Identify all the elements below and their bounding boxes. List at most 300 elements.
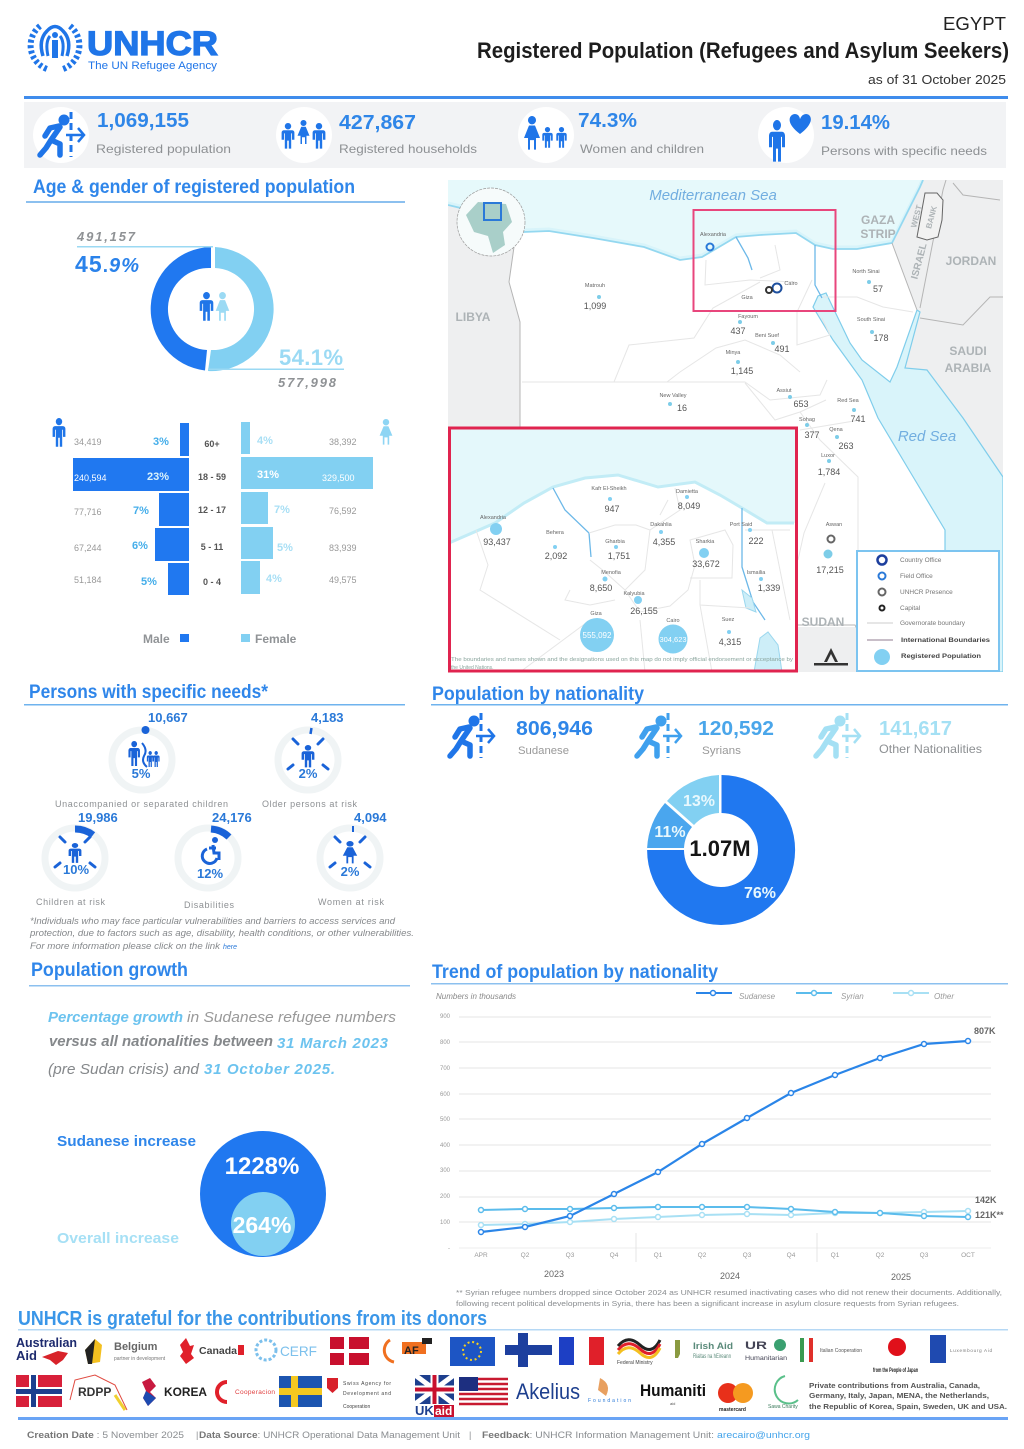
flag: Denmark xyxy=(330,1337,369,1365)
governorate labels: main map: 653 xyxy=(793,399,809,409)
gauge: older persons: 2% xyxy=(299,766,318,781)
donor: Ireland: Irish Aid xyxy=(693,1341,733,1351)
text block: growth description: 31 October 2025. xyxy=(204,1061,335,1078)
gauge: women at risk: 4,094 xyxy=(354,810,387,825)
female percentages: 7% xyxy=(274,504,290,516)
gauge: older persons: 4,183 xyxy=(311,710,344,725)
governorate labels: main map: 57 xyxy=(873,284,883,294)
donor: Spain: Cooperacion xyxy=(235,1389,275,1396)
inset labels: Damietta xyxy=(676,489,699,495)
year labels: 2023 xyxy=(544,1269,564,1279)
y axis labels: 900 xyxy=(440,1014,451,1020)
inset labels: Kalyubia xyxy=(623,591,645,597)
donor: Switzerland: Development and xyxy=(343,1391,391,1397)
governorate labels: main map: North Sinai xyxy=(852,269,880,275)
governorate labels: main map: South Sinai xyxy=(857,317,885,323)
governorate labels: main map: 491 xyxy=(774,344,790,354)
trend legend xyxy=(696,990,954,1001)
male values: 67,244 xyxy=(74,543,102,553)
donor: Ireland xyxy=(675,1340,733,1360)
y axis labels: - xyxy=(448,1246,450,1252)
female callout: 54.1% xyxy=(279,345,343,370)
figure: Sudanese xyxy=(450,713,593,758)
footnote: Syrian numbers xyxy=(456,1288,1002,1308)
panel: specific needs gauges xyxy=(29,710,414,952)
y axis labels: 600 xyxy=(440,1092,451,1098)
gauge: unaccompanied children: 5% xyxy=(132,766,151,781)
inset labels: Behera xyxy=(546,530,565,536)
footer: arecairo@unhcr.org xyxy=(717,1430,810,1440)
map legend: Country Office xyxy=(900,557,942,564)
governorate labels: main map: 1,145 xyxy=(731,366,753,376)
inset labels: Giza xyxy=(590,611,603,617)
gauge: children at risk: 10% xyxy=(63,862,89,877)
donor: UK aid: UK xyxy=(415,1403,434,1418)
inset labels: 555,092 xyxy=(583,631,612,640)
donor: Ireland: Rialtas na hEireann xyxy=(693,1354,731,1360)
footnote: Syrian numbers: following recent political developments in Syria, there has been a significant increase in asylum closure requests from Syrian refugees. xyxy=(456,1299,959,1308)
x axis labels: Q2 xyxy=(698,1252,707,1259)
female values: 38,392 xyxy=(329,437,357,447)
gauge: children at risk: Children at risk xyxy=(36,897,106,907)
donor: Mastercard xyxy=(718,1383,753,1413)
age labels: 5 - 11 xyxy=(201,542,223,552)
figure: Syrians: 120,592 xyxy=(698,718,774,740)
donor logos xyxy=(16,1333,1007,1418)
disclaimer xyxy=(451,657,793,669)
offices on main map xyxy=(706,244,834,542)
chart: nationality donut: 11% xyxy=(654,824,686,841)
icon: refugee crossing xyxy=(40,112,84,157)
inset labels: 1,751 xyxy=(608,551,630,561)
governorate labels: main map: 263 xyxy=(838,441,854,451)
chart: nationality donut: 1.07M xyxy=(689,836,751,861)
figure: Syrians: Syrians xyxy=(702,745,742,757)
text: private contributions: Private contributions from Australia, Canada, xyxy=(809,1381,980,1390)
female values: 49,575 xyxy=(329,575,357,585)
governorate labels: main map: Red Sea xyxy=(837,398,860,404)
year labels: 2024 xyxy=(720,1271,740,1281)
x axis labels: OCT xyxy=(961,1252,975,1259)
disclaimer: The boundaries and names shown and the designations used on this map do not imply official endorsement or acceptance by xyxy=(451,657,794,663)
text: private contributions: the Republic of Korea, Spain, Sweden, UK and USA. xyxy=(809,1402,1007,1411)
x axis labels xyxy=(474,1252,975,1259)
inset labels: Dakahlia xyxy=(650,522,673,528)
map legend: UNHCR Presence xyxy=(900,589,953,596)
chart: growth circles xyxy=(57,1131,326,1257)
location frame xyxy=(694,210,836,311)
governorate labels: main map: 178 xyxy=(873,333,889,343)
figure: registered population: 1,069,155 xyxy=(97,110,189,132)
gauge: disabilities: Disabilities xyxy=(184,900,234,910)
inset labels: 8,049 xyxy=(678,501,700,511)
flag: Sweden xyxy=(279,1376,322,1407)
icon: specific needs xyxy=(769,114,811,162)
chart: gender donut xyxy=(75,229,344,390)
male values xyxy=(74,437,107,585)
governorate labels: main map: Luxor xyxy=(821,453,835,459)
donor: Japan xyxy=(873,1338,918,1374)
x axis labels: Q1 xyxy=(654,1252,663,1259)
country labels: WEST xyxy=(909,204,924,229)
donor: foundation xyxy=(588,1378,631,1404)
male values: 34,419 xyxy=(74,437,102,447)
male values: 77,716 xyxy=(74,507,102,517)
logo wordmark: UNHCR xyxy=(87,25,218,63)
age labels xyxy=(198,439,226,587)
y axis labels: 500 xyxy=(440,1117,451,1123)
inset labels: Gharbia xyxy=(605,539,626,545)
chart: growth circles: Sudanese increase xyxy=(57,1133,196,1150)
governorate labels: main map: Fayoum xyxy=(738,314,758,320)
series: Syrian xyxy=(478,1204,970,1220)
footer: Creation Date : 5 November 2025 xyxy=(27,1430,184,1440)
inset labels xyxy=(480,486,780,647)
governorate labels: main map: Aswan xyxy=(826,522,842,528)
inset labels: Kafr El-Sheikh xyxy=(591,486,627,492)
governorate labels: main map: Sohag xyxy=(799,417,815,423)
icon: male xyxy=(53,418,65,447)
text block: growth description xyxy=(48,1009,397,1078)
map legend xyxy=(857,551,999,671)
donor: Korea xyxy=(142,1378,207,1406)
donor: Humaniti: Humaniti xyxy=(640,1381,706,1400)
country labels xyxy=(456,204,996,629)
donor: Spain xyxy=(217,1382,275,1402)
inset markers xyxy=(490,495,763,654)
donor: multi-partner fund xyxy=(745,1339,787,1362)
footnote: protection, due to factors such as age, disability, health conditions, or other vulnerabilities. xyxy=(29,928,414,939)
country labels: GAZA xyxy=(861,213,895,227)
inset labels: 93,437 xyxy=(483,537,511,547)
chart: nationality donut: 76% xyxy=(744,885,776,902)
figure: Sudanese: 806,946 xyxy=(516,718,593,740)
governorate labels: main map: Beni Suef xyxy=(755,333,779,339)
title block xyxy=(477,14,1009,87)
text: private contributions xyxy=(809,1381,1007,1411)
heading: donors: UNHCR is grateful for the contributions from its donors xyxy=(18,1308,487,1330)
gauge: women at risk xyxy=(318,810,387,907)
inset labels: Cairo xyxy=(666,618,680,624)
figure: Syrians xyxy=(637,713,774,758)
map legend: Field Office xyxy=(900,573,933,580)
logo: UNHCR xyxy=(31,25,218,72)
donor: UK aid xyxy=(415,1375,454,1418)
inset labels: 947 xyxy=(604,504,620,514)
male percentages xyxy=(132,436,169,588)
trend legend: Other xyxy=(934,992,954,1001)
chart: nationality donut: 13% xyxy=(683,793,715,810)
chart: age pyramid xyxy=(53,418,392,646)
donor: Switzerland: Swiss Agency for xyxy=(343,1381,391,1387)
icon: UNHCR wreath and hands xyxy=(31,26,79,69)
male percentages: 7% xyxy=(133,505,149,517)
heading: age and gender: Age & gender of registered population xyxy=(33,177,355,198)
governorate labels: main map: Alexandria xyxy=(700,232,727,238)
inset labels: Ismailia xyxy=(747,570,766,576)
female callout xyxy=(208,345,344,390)
governorate labels: main map xyxy=(584,232,889,575)
male values: 51,184 xyxy=(74,575,102,585)
end labels xyxy=(974,1026,1004,1220)
figure: women and children: 74.3% xyxy=(578,110,637,132)
footnote: here xyxy=(223,944,237,951)
label: Red Sea: Red Sea xyxy=(898,428,956,445)
panel: nationality figures xyxy=(450,713,982,758)
donor: Canada: Canada xyxy=(199,1346,237,1357)
logo tagline: The UN Refugee Agency xyxy=(88,60,218,72)
gauge: unaccompanied children xyxy=(55,710,228,809)
figure: households: Registered households xyxy=(339,142,477,156)
donor: DRL: AF xyxy=(404,1345,419,1357)
female percentages: 31% xyxy=(257,469,279,481)
footnote: For more information please click on the link xyxy=(30,941,221,952)
governorate labels: main map: Assiut xyxy=(777,388,792,394)
donor: Belgium: Belgium xyxy=(114,1341,158,1353)
flag: France xyxy=(559,1337,604,1365)
inset labels: 26,155 xyxy=(630,606,658,616)
figure: women and children: Women and children xyxy=(580,142,704,156)
y axis labels: 200 xyxy=(440,1194,451,1200)
governorate labels: main map: Matrouh xyxy=(585,283,605,289)
sea label: Mediterranean Sea xyxy=(649,187,777,204)
gauge: disabilities xyxy=(178,810,252,910)
figure: specific needs: 19.14% xyxy=(821,112,890,134)
male bars xyxy=(73,423,189,595)
y axis labels: 800 xyxy=(440,1040,451,1046)
governorate labels: main map: 437 xyxy=(730,326,746,336)
footer: Feedback : UNHCR Information Management Unit: xyxy=(482,1430,714,1440)
inset labels: 4,355 xyxy=(653,537,675,547)
y axis labels xyxy=(440,1014,451,1252)
text block: growth description: 31 March 2023 xyxy=(277,1035,389,1052)
donor: Mastercard: mastercard xyxy=(719,1407,746,1413)
gauge: disabilities: 24,176 xyxy=(212,810,252,825)
x axis labels: Q3 xyxy=(743,1252,752,1259)
pyramid legend: Male xyxy=(143,632,170,646)
inset labels: 304,623 xyxy=(659,635,687,644)
donor: Australian Aid: Aid xyxy=(16,1348,37,1363)
pyramid legend xyxy=(143,632,297,646)
globe locator xyxy=(457,188,525,256)
male values: 240,594 xyxy=(74,473,107,483)
series: Sudanese xyxy=(478,1038,970,1234)
y axis labels: 100 xyxy=(440,1220,451,1226)
male percentages: 23% xyxy=(147,471,169,483)
chart: nationality donut xyxy=(647,775,795,925)
footnote xyxy=(29,916,414,952)
figure: specific needs: Persons with specific needs xyxy=(821,144,987,158)
chart: growth circles: Overall increase xyxy=(57,1230,179,1247)
female percentages xyxy=(257,435,293,585)
panel: key figures xyxy=(24,102,1006,168)
country labels: SAUDI xyxy=(949,344,987,358)
donor: CERF xyxy=(256,1340,317,1360)
donor: RDPP xyxy=(70,1375,127,1410)
governorate labels: main map: 1,784 xyxy=(818,467,840,477)
figure: Sudanese: Sudanese xyxy=(518,745,569,757)
pyramid legend: Female xyxy=(255,632,297,646)
donor: crescent xyxy=(768,1376,798,1410)
flag: Finland xyxy=(505,1333,552,1367)
male percentages: 3% xyxy=(153,436,169,448)
female percentages: 5% xyxy=(277,542,293,554)
donor: Luxembourg xyxy=(930,1335,992,1363)
inset labels: 1,339 xyxy=(758,583,780,593)
country labels: ISRAEL xyxy=(910,242,930,280)
north arrow xyxy=(814,648,848,666)
age labels: 18 - 59 xyxy=(198,472,226,482)
donor: Switzerland xyxy=(327,1378,391,1410)
male callout: 491,157 xyxy=(76,229,136,244)
series: other xyxy=(478,1208,970,1228)
male percentages: 5% xyxy=(141,576,157,588)
age labels: 12 - 17 xyxy=(198,505,226,515)
footer: | xyxy=(196,1430,198,1440)
donor: multi-partner fund: Humanitarian xyxy=(745,1356,787,1362)
donor: CERF: CERF xyxy=(280,1343,317,1359)
female values: 329,500 xyxy=(322,473,355,483)
x axis labels: Q2 xyxy=(876,1252,885,1259)
heading: nationality: Population by nationality xyxy=(432,684,644,705)
governorate labels: main map: 741 xyxy=(850,414,866,424)
end labels: 121K** xyxy=(975,1210,1004,1220)
gauge: women at risk: Women at risk xyxy=(318,897,384,907)
country labels: BANK xyxy=(924,205,939,230)
land: Egypt xyxy=(509,231,960,627)
icon: household xyxy=(282,120,325,149)
icon: man and woman xyxy=(200,292,229,321)
donor: DRL xyxy=(384,1338,432,1362)
sea: Red Sea and gulfs xyxy=(813,293,1003,672)
x axis labels: Q1 xyxy=(831,1252,840,1259)
x axis labels: Q2 xyxy=(521,1252,530,1259)
female percentages: 4% xyxy=(266,573,282,585)
gauge: disabilities: 12% xyxy=(197,866,223,881)
heading: trend: Trend of population by nationality xyxy=(432,962,718,983)
country labels: JORDAN xyxy=(946,254,996,268)
inset labels: Menofia xyxy=(601,570,622,576)
date: as of 31 October 2025 xyxy=(868,72,1006,87)
donor: UK aid: aid xyxy=(435,1404,452,1418)
gauge: women at risk: 2% xyxy=(341,864,360,879)
footnote: *Individuals who may face particular vulnerabilities and barriers to access services and xyxy=(30,916,396,927)
gauge: unaccompanied children: Unaccompanied or separated children xyxy=(55,799,228,809)
inset labels: Port Said xyxy=(730,522,752,528)
female callout: 577,998 xyxy=(278,375,337,390)
y axis labels: 400 xyxy=(440,1143,451,1149)
age labels: 60+ xyxy=(204,439,220,449)
donor: Italy: Italian Cooperation xyxy=(820,1348,862,1354)
country labels: SUDAN xyxy=(802,615,844,629)
text block: growth description: in Sudanese refugee numbers xyxy=(187,1009,397,1026)
footer: | xyxy=(469,1430,471,1440)
footnote: Syrian numbers: ** Syrian refugee numbers dropped since October 2024 as UNHCR resumed inactivating cases who did not renew their documents. Additionally, xyxy=(456,1288,1002,1297)
flag: European Union xyxy=(450,1337,495,1366)
donor: Australian Aid: Australian xyxy=(16,1335,77,1350)
map legend: Capital xyxy=(900,605,921,612)
donor: Germany xyxy=(617,1340,660,1366)
figure: households: 427,867 xyxy=(339,112,416,134)
country labels: STRIP xyxy=(860,227,896,241)
disclaimer: the United Nations. xyxy=(451,665,494,671)
map legend: Governorate boundary xyxy=(900,620,966,627)
x axis labels: Q3 xyxy=(566,1252,575,1259)
donor: Humaniti: aid xyxy=(670,1401,675,1406)
x axis labels: APR xyxy=(474,1252,488,1259)
icon: female xyxy=(380,419,392,445)
donor: Belgium: partner in development xyxy=(114,1356,166,1362)
inset labels: 33,672 xyxy=(692,559,720,569)
donor: crescent: Sawa Charity xyxy=(768,1404,798,1410)
footer xyxy=(27,1430,810,1440)
figure: women and children xyxy=(578,110,704,156)
donor: Akelius: Akelius xyxy=(516,1379,580,1404)
figure: specific needs xyxy=(821,112,987,158)
male callout: 45.9% xyxy=(75,251,139,277)
age labels: 0 - 4 xyxy=(203,577,221,587)
text: private contributions: Germany, Italy, Japan, MENA, the Netherlands, xyxy=(809,1391,989,1400)
figure: registered population: Registered population xyxy=(96,142,231,156)
gauge: unaccompanied children: 10,667 xyxy=(148,710,188,725)
figure: other nationalities: 141,617 xyxy=(879,718,952,740)
heading: specific needs: Persons with specific needs* xyxy=(29,682,269,703)
trend legend: Syrian xyxy=(841,992,864,1001)
gauge: children at risk xyxy=(36,810,118,907)
figure: other nationalities xyxy=(816,713,982,758)
female bars xyxy=(241,422,373,594)
figure: other nationalities: Other Nationalities xyxy=(879,742,982,756)
male callout xyxy=(75,229,213,277)
y axis labels: 300 xyxy=(440,1168,451,1174)
governorate labels: main map: 377 xyxy=(804,430,820,440)
icon: women and children xyxy=(524,116,567,150)
chart: trend lines xyxy=(436,990,1004,1282)
figure: households xyxy=(339,112,477,156)
donor: Belgium xyxy=(85,1339,166,1364)
country: EGYPT xyxy=(943,14,1006,34)
chart: growth circles: 1228% xyxy=(225,1153,299,1180)
country labels: ARABIA xyxy=(945,361,992,375)
governorate labels: main map: Cairo xyxy=(784,281,798,287)
male percentages: 6% xyxy=(132,540,148,552)
footer: Data Source : UNHCR Operational Data Management Unit xyxy=(199,1430,461,1440)
gauge: children at risk: 19,986 xyxy=(78,810,118,825)
text block: growth description: (pre Sudan crisis) and xyxy=(48,1061,200,1078)
y axis labels: 700 xyxy=(440,1066,451,1072)
donor: Germany: Federal Ministry xyxy=(617,1360,653,1366)
country labels: LIBYA xyxy=(456,310,491,324)
map of Egypt xyxy=(448,178,1003,672)
inset labels: Alexandria xyxy=(480,515,507,521)
inset labels: 222 xyxy=(748,536,764,546)
heading: population growth: Population growth xyxy=(31,960,188,981)
donor: Luxembourg: Luxembourg Aid xyxy=(950,1348,992,1353)
governorate labels: main map: 16 xyxy=(677,403,687,413)
trend legend: Sudanese xyxy=(739,992,776,1001)
donor: foundation: Foundation xyxy=(588,1398,631,1404)
x axis labels: Q4 xyxy=(787,1252,796,1259)
donor: Switzerland: Cooperation xyxy=(343,1404,370,1410)
inset labels: 2,092 xyxy=(545,551,567,561)
chart: growth circles: 264% xyxy=(233,1212,291,1238)
female values xyxy=(322,437,357,585)
inset labels: 4,315 xyxy=(719,637,741,647)
female values: 83,939 xyxy=(329,543,357,553)
governorate labels: main map: Qena xyxy=(829,427,844,433)
gauge: older persons xyxy=(262,710,358,809)
map legend: Registered Population xyxy=(901,653,981,660)
